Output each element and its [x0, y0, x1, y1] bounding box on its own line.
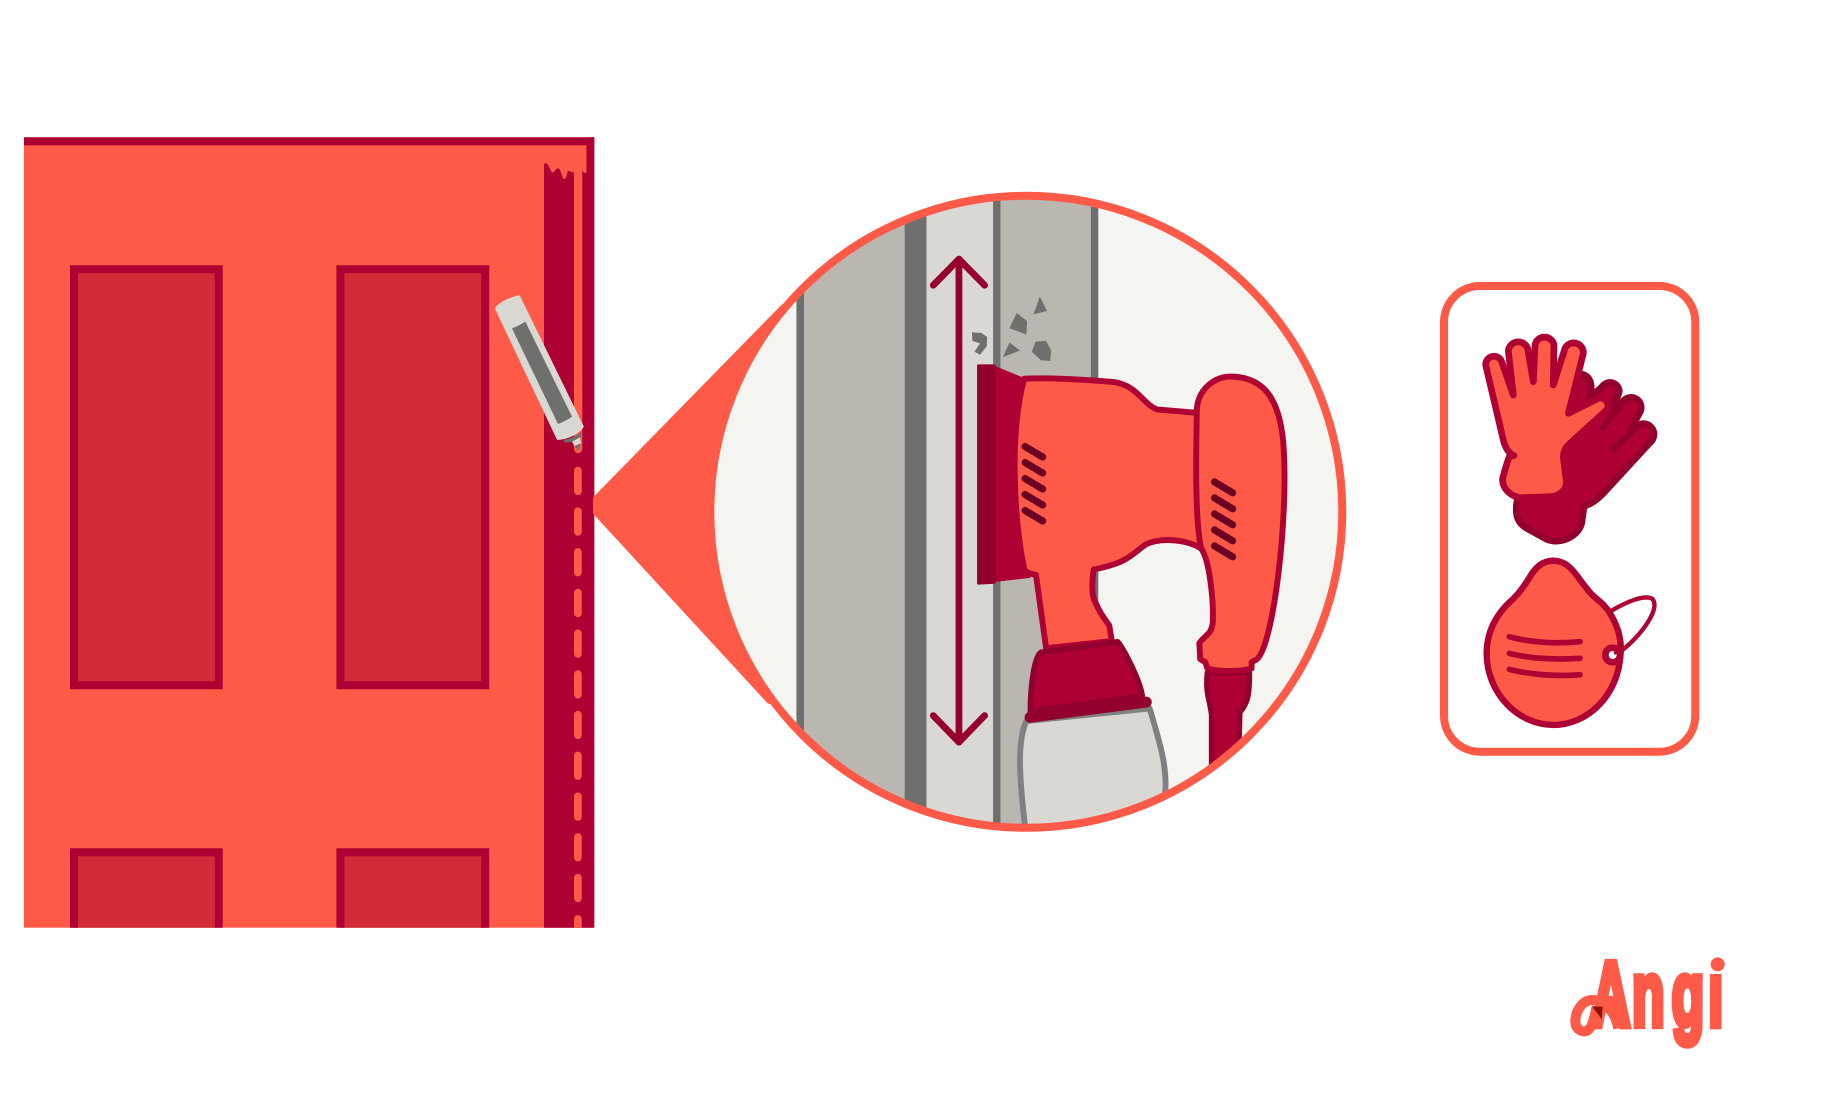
collar band	[1030, 702, 1146, 717]
logo wordmark: n	[1632, 942, 1665, 1045]
mask strap	[1612, 597, 1654, 651]
icon: marker pen	[495, 296, 583, 451]
infographic canvas	[24, 137, 1725, 1049]
back glove	[1516, 374, 1654, 541]
logo dot	[1711, 957, 1725, 971]
callout pointer	[597, 308, 800, 700]
front glove	[1486, 337, 1608, 498]
circle background	[710, 196, 1342, 828]
icon: dust mask	[1487, 561, 1654, 725]
logo: Angi	[1575, 942, 1728, 1045]
door right edge trim	[544, 137, 594, 928]
panel: magnified circle	[710, 180, 1342, 840]
strap ring	[1605, 648, 1622, 662]
logo swoosh shadow	[1592, 1007, 1603, 1019]
power cord	[1207, 673, 1249, 769]
circle outline	[710, 196, 1342, 828]
panel: door with painter's tape line	[24, 137, 594, 928]
sander body	[1015, 378, 1201, 648]
upper right recessed panel	[340, 269, 485, 685]
panel frame	[1444, 286, 1695, 752]
logo wordmark: A	[1592, 942, 1630, 1045]
upper left recessed panel	[74, 269, 219, 685]
sander base plate	[979, 365, 1031, 583]
logo swoosh	[1575, 1000, 1618, 1031]
sander handle	[1196, 377, 1285, 671]
wall studs and seam strips	[796, 180, 1098, 840]
mask shell	[1487, 561, 1621, 725]
lower left recessed panel	[74, 852, 219, 928]
mask pleats	[1509, 637, 1580, 675]
solid painted seam	[574, 165, 582, 453]
dust debris	[972, 297, 1051, 361]
logo wordmark: g	[1672, 942, 1704, 1045]
hose collar	[1031, 642, 1142, 711]
handle vents	[1215, 482, 1233, 557]
logo wordmark: i	[1708, 942, 1723, 1045]
double-headed arrow	[933, 259, 985, 742]
door top edge	[24, 137, 594, 145]
dust hose	[1020, 708, 1166, 837]
door slab	[24, 137, 594, 928]
body vents	[1025, 447, 1043, 521]
icon: gloves	[1486, 337, 1654, 541]
lower right recessed panel	[340, 852, 485, 928]
panel: safety gear	[1444, 286, 1695, 752]
dashed seam line	[574, 467, 582, 928]
magnified scene	[796, 180, 1285, 840]
